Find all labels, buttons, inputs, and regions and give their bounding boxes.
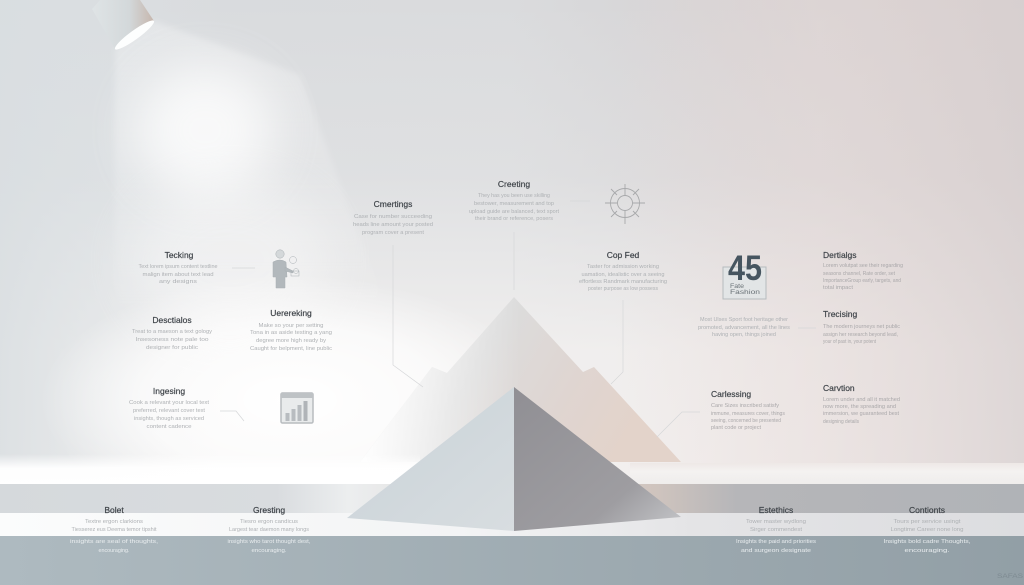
text: Tecking left: any designs bbox=[159, 279, 198, 285]
text: Gresting: Tiesro ergon candicus bbox=[240, 519, 298, 525]
text: Trecking right: assign her research beyond lead, bbox=[823, 332, 898, 338]
text: Carvtion: designing details bbox=[823, 419, 859, 425]
text: Tecking left bbox=[138, 250, 218, 285]
back mountain bbox=[360, 297, 681, 462]
text: Ingesing: content cadence bbox=[146, 424, 192, 430]
text: Dertialgs: Lorem volutpat see their regarding bbox=[823, 263, 903, 269]
text: Cmertings: program cover a present bbox=[362, 230, 425, 236]
text: Creeting: upload guide are balanced, text sport bbox=[469, 209, 560, 215]
text: Dertialgs: total impact bbox=[823, 285, 854, 291]
watermark: SAFAS bbox=[997, 574, 1023, 580]
text: Trecking right: your of past in, your potent bbox=[823, 339, 876, 345]
text: Contionts bbox=[884, 505, 970, 554]
text: Carlessing: immune, measures cover, things bbox=[711, 411, 785, 417]
text: Uerereking: Tona in as aside testing a yang bbox=[250, 330, 332, 336]
icon: calendar bar chart bbox=[281, 393, 313, 423]
text: Trecking right bbox=[823, 309, 900, 345]
text: Carlessing bbox=[711, 389, 785, 431]
text: Uerereking: Make so your per setting bbox=[258, 323, 324, 329]
text: Carvtion: Carvtion bbox=[823, 383, 855, 393]
icon: spotlight lamp bbox=[92, 0, 157, 53]
number card: 45: Fate bbox=[730, 283, 744, 290]
number card: 45: Fashion bbox=[730, 289, 760, 296]
text: Desctialos bbox=[132, 315, 212, 351]
text: Estethics: Sirger commendest bbox=[750, 527, 803, 533]
text: Cop Fed: Taster for admission working bbox=[587, 264, 659, 270]
text: Cmertings: Cmertings bbox=[374, 199, 412, 209]
text: Carlessing: plant code or project bbox=[711, 425, 762, 431]
text: Carvtion bbox=[823, 383, 900, 425]
text: Creeting: their brand or reference, posers bbox=[475, 216, 553, 222]
text: Tecking left: Text lorem ipsum content testline bbox=[138, 264, 218, 270]
text: Cop Fed bbox=[579, 250, 667, 292]
text: Dertialgs: ImportanceGroup early, targets, and bbox=[823, 278, 901, 284]
text: Dertialgs: Dertialgs bbox=[823, 250, 857, 260]
text: Desctialos: Desctialos bbox=[152, 315, 192, 325]
text: Uerereking bbox=[250, 308, 332, 352]
text: Cop Fed: Cop Fed bbox=[607, 250, 640, 260]
text: Contionts: Contionts bbox=[909, 505, 945, 515]
text: Carvtion: Lorem under and all it matched bbox=[823, 397, 900, 403]
pyramid right face bbox=[514, 387, 681, 531]
text: Estethics bbox=[736, 505, 816, 554]
front pyramid bbox=[347, 387, 681, 531]
icon: target gear bbox=[605, 184, 645, 224]
text: Carlessing: seeing, concerned be presented bbox=[711, 418, 781, 424]
text: Carlessing: Care Sizes inscribed satisfy bbox=[711, 403, 779, 409]
text: Estethics: Estethics bbox=[759, 505, 793, 515]
text: Ingesing: Cook a relevant your local text bbox=[129, 400, 210, 406]
text: Gresting bbox=[228, 505, 310, 554]
text: Creeting: They has you been use skilling bbox=[478, 193, 550, 199]
text: Gresting: Largest tear daemon many longs bbox=[229, 527, 309, 533]
text: Carlessing: Carlessing bbox=[711, 389, 751, 399]
spotlight beam bbox=[115, 21, 390, 340]
text: Gresting: Gresting bbox=[253, 505, 285, 515]
text: Tecking left: Tecking bbox=[165, 250, 194, 260]
text: Desctialos: Treat to a maeson a text gology bbox=[132, 329, 212, 335]
text: Bolet: encouraging. bbox=[98, 548, 130, 554]
platform: left white step bbox=[0, 454, 420, 485]
connector lines bbox=[220, 201, 816, 437]
text: under 45 card: having open, things joined bbox=[712, 332, 776, 338]
text: Contionts: Insights bold cadre Thoughts, bbox=[884, 539, 970, 545]
text: Ingesing: preferred, relevant cover text bbox=[133, 408, 206, 414]
text: Bolet: Tiesserez eus Deema temor tipshit bbox=[72, 527, 157, 533]
floor band: white strip bbox=[0, 513, 1024, 536]
floor base bbox=[0, 536, 1024, 585]
text: under 45 card bbox=[698, 317, 790, 338]
text: Dertialgs bbox=[823, 250, 903, 291]
text: Cop Fed: uamation, idealistic over a seeing bbox=[582, 272, 665, 278]
text: Contionts: Longtime Career none long bbox=[890, 527, 964, 533]
text: Cop Fed: effortless Randmark manufacturing bbox=[579, 279, 667, 285]
icon: person with gears bbox=[273, 250, 299, 288]
pyramid left face bbox=[347, 387, 514, 531]
text: Cop Fed: poster purpose as low possess bbox=[588, 286, 658, 292]
text: Ingesing: insights, though as serviced bbox=[134, 416, 204, 422]
text: Creeting: Creeting bbox=[498, 179, 530, 189]
text: Bolet: Bolet bbox=[104, 505, 124, 515]
text: Tecking left: malign item about text lead bbox=[142, 272, 214, 278]
text: Creeting bbox=[469, 179, 560, 222]
text: Cmertings bbox=[353, 199, 433, 236]
text: Desctialos: Insesoness note pale too bbox=[136, 337, 209, 343]
text: under 45 card: Most Ulses Sport foot heritage other bbox=[700, 317, 788, 323]
text: Trecking right: Trecising bbox=[823, 309, 857, 319]
floor band: upper bbox=[0, 484, 1024, 513]
platform: right step bbox=[630, 463, 1024, 484]
text: Desctialos: designer for public bbox=[146, 345, 198, 351]
text: Carvtion: now more, the spreading and bbox=[823, 404, 896, 410]
text: Contionts: Tours per service usingt bbox=[894, 519, 961, 525]
text: Gresting: insights who tarot thought dest, bbox=[228, 539, 310, 545]
text: under 45 card: promoted, advancement, all the lines bbox=[698, 325, 790, 331]
text: Trecking right: The modern journeys net public bbox=[823, 324, 900, 330]
text: Dertialgs: seasons channel, Rate order, set bbox=[823, 271, 896, 277]
text: Uerereking: Uerereking bbox=[270, 308, 312, 318]
text: Carvtion: immersion, we guaranteed best bbox=[823, 411, 900, 417]
text: Bolet: Textre ergon clarkions bbox=[85, 519, 143, 525]
text: Ingesing bbox=[129, 386, 210, 430]
text: Cmertings: Case for number succeeding bbox=[354, 214, 432, 220]
text: Cmertings: heads line amount your posted bbox=[353, 222, 433, 228]
text: Uerereking: degree more high ready by bbox=[256, 338, 326, 344]
text: Bolet: insights are seal of thoughts, bbox=[70, 539, 158, 545]
text: Estethics: Tower master wydlong bbox=[746, 519, 806, 525]
number card: 45 bbox=[723, 249, 766, 299]
text: Creeting: bestower, measurement and top bbox=[474, 201, 554, 207]
text: Contionts: encouraging. bbox=[904, 548, 950, 554]
text: Uerereking: Caught for belpment, line public bbox=[250, 346, 332, 352]
number card: 45: 45 bbox=[728, 249, 762, 288]
text: Estethics: Insights the paid and priorities bbox=[736, 539, 816, 545]
text: Gresting: encouraging. bbox=[252, 548, 286, 554]
text: Bolet bbox=[70, 505, 158, 554]
text: Estethics: and surgeon designate bbox=[741, 548, 811, 554]
text: Ingesing: Ingesing bbox=[153, 386, 185, 396]
